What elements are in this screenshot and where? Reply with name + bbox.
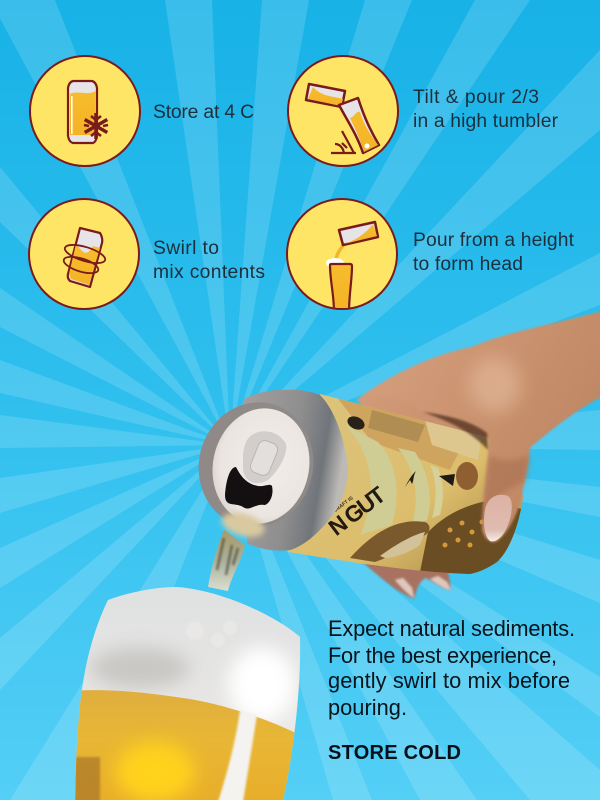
- text block: sediments note: For the best experience,: [328, 643, 557, 668]
- photo: hand in front of can: [357, 312, 600, 542]
- text block: sediments note: Expect natural sediments.: [328, 616, 575, 641]
- can pull tab: [243, 431, 286, 483]
- label: tilt and pour: in a high tumbler: [413, 111, 559, 132]
- step 1: store at 4 C: [30, 56, 254, 166]
- label: tilt and pour: Tilt & pour 2/3: [413, 87, 539, 108]
- photo: beer glass: [70, 587, 300, 800]
- photo: lower fingers: [362, 560, 451, 599]
- text block: sediments note: gently swirl to mix before: [328, 668, 570, 693]
- beer body: [70, 690, 300, 800]
- can lid: [202, 399, 320, 533]
- can body and label: [288, 394, 523, 574]
- label: swirl: [153, 238, 265, 283]
- step 4: pour from a height: [287, 199, 575, 312]
- vertical white highlight: [218, 710, 257, 800]
- icon circle: can with snowflake: [30, 56, 140, 166]
- hand highlight: [469, 357, 521, 413]
- can top rim: [185, 390, 327, 540]
- shadow between palm and can: [423, 412, 488, 450]
- photo: hand and forearm behind can: [357, 312, 600, 470]
- thumb nail: [484, 495, 512, 541]
- dark strip lower left: [75, 757, 100, 800]
- glass outline with foam: [75, 587, 300, 800]
- foam bubbles: [185, 620, 238, 648]
- icon circle: can with swirl lines: [29, 199, 139, 309]
- label: pour from a height: Pour from a height: [413, 230, 575, 251]
- can label wordmark: N GUT: [324, 481, 390, 541]
- icon circle: can pouring into glass: [287, 199, 397, 312]
- step 3: swirl: [29, 199, 265, 309]
- foam brightness: [228, 647, 296, 723]
- thumb shading: [483, 455, 530, 525]
- label: swirl: mix contents: [153, 262, 265, 283]
- step 2: tilt and pour: [288, 56, 559, 166]
- label: store at 4 C: Store at 4 C: [153, 102, 254, 123]
- foam at can mouth: [219, 509, 267, 541]
- label: pour from a height: to form head: [413, 254, 523, 275]
- can opening: [225, 467, 273, 509]
- label: tilt and pour: [413, 87, 559, 132]
- icon circle: tilted can and glass with angle: [288, 56, 398, 166]
- heading: store cold: STORE COLD: [328, 742, 461, 764]
- photo: beer can: [198, 390, 523, 574]
- text block: sediments note: pouring.: [328, 695, 407, 720]
- text block: sediments note: [328, 616, 575, 720]
- label: pour from a height: [413, 230, 575, 275]
- photo: beer stream: [208, 530, 245, 591]
- label: swirl: Swirl to: [153, 238, 219, 259]
- foam shading: [90, 648, 190, 688]
- can label wordmark: THE CRAFT IS: [323, 495, 355, 521]
- can neck: [243, 390, 348, 551]
- bright bubbles glow: [115, 742, 195, 800]
